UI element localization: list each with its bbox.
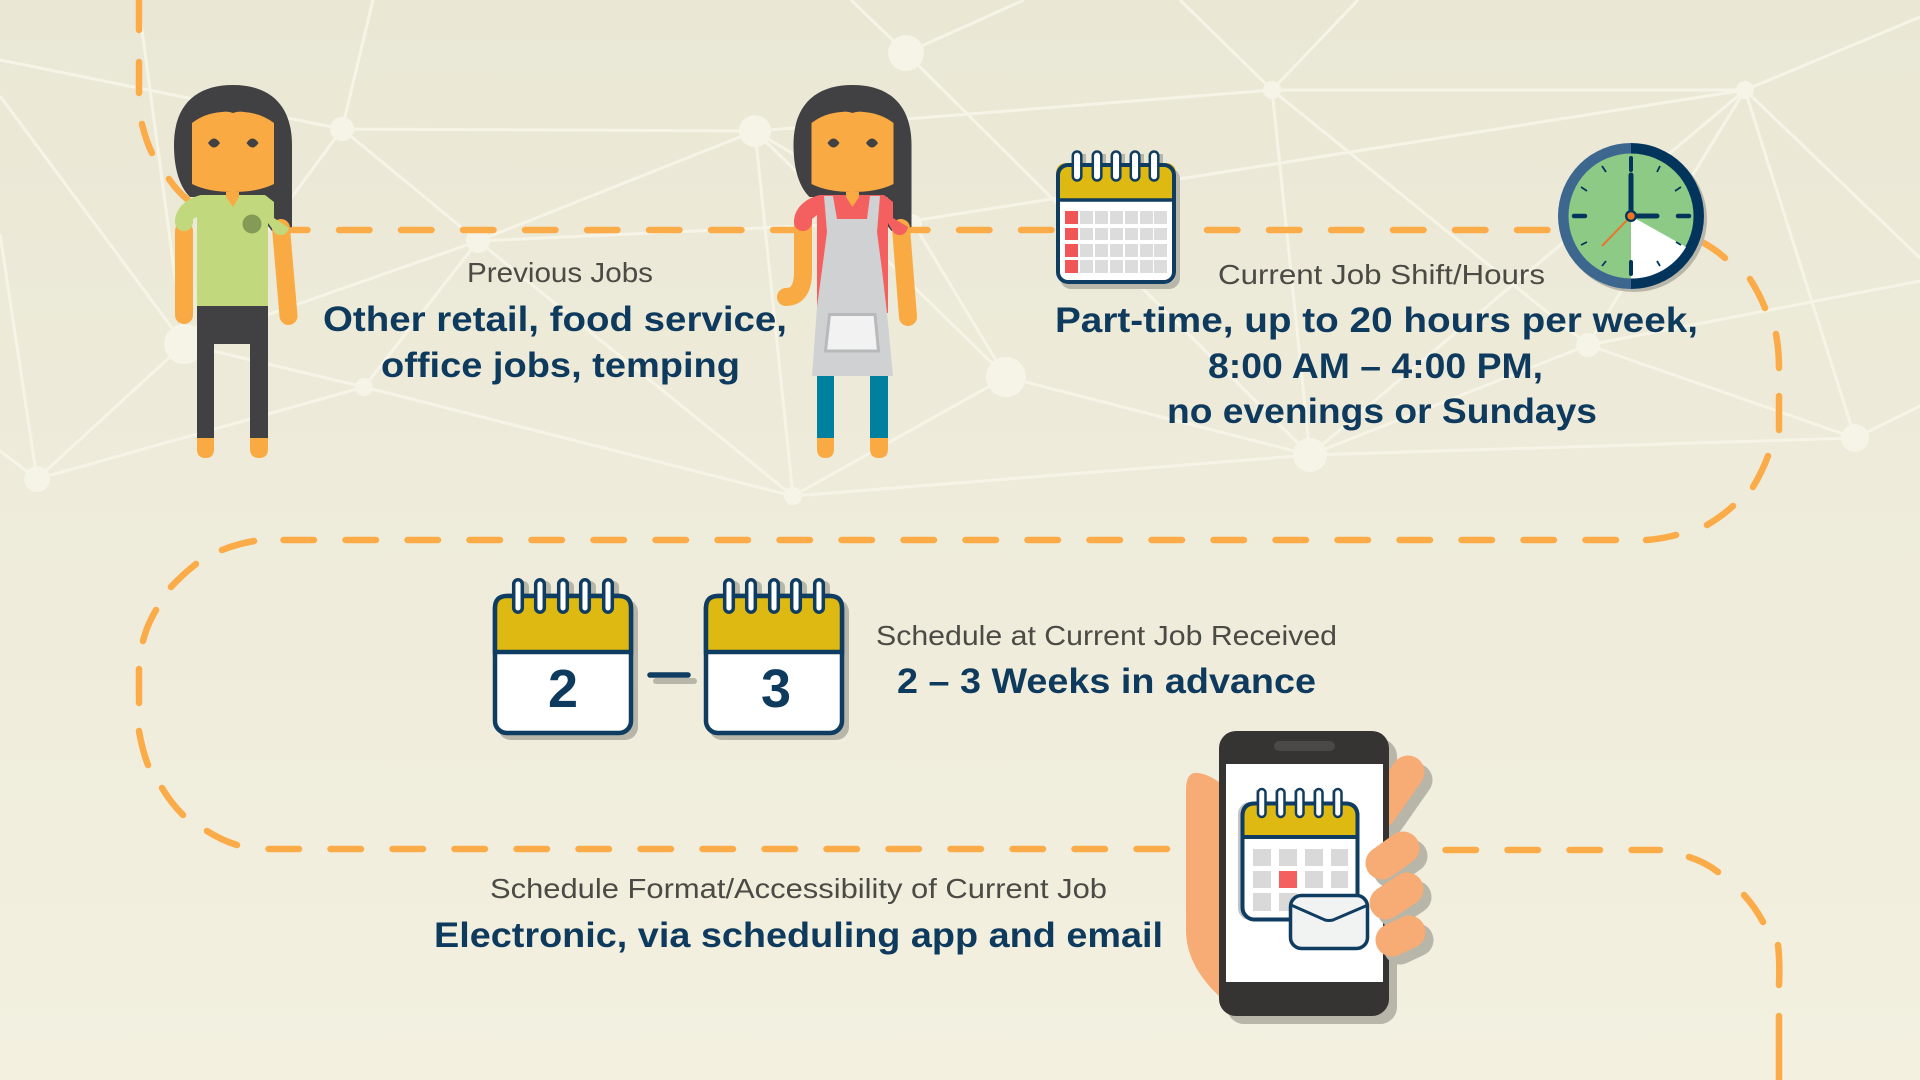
- icon: monthly calendar: [1056, 152, 1180, 289]
- icon: calendar showing 3: 3: [761, 659, 791, 719]
- dash between calendars: [650, 675, 694, 681]
- previous jobs text: Previous Jobs: [467, 257, 653, 288]
- worker in previous job: green shirt: [174, 85, 292, 458]
- schedule received text: [876, 620, 1337, 701]
- icon: hand holding phone with calendar and envelope: [1186, 731, 1417, 1024]
- current job shift and hours text: no evenings or Sundays: [1167, 392, 1597, 431]
- schedule format text: Schedule Format/Accessibility of Current Job: [490, 873, 1107, 904]
- schedule received text: Schedule at Current Job Received: [876, 620, 1337, 651]
- previous jobs text: office jobs, temping: [381, 346, 740, 385]
- current job shift and hours text: [1055, 259, 1698, 431]
- schedule received text: 2 – 3 Weeks in advance: [897, 662, 1316, 701]
- previous jobs text: Other retail, food service,: [323, 300, 787, 339]
- icon: calendar showing 3: [706, 580, 849, 740]
- schedule format text: Electronic, via scheduling app and email: [434, 916, 1163, 955]
- background network pattern: [0, 0, 1920, 505]
- current job shift and hours text: Part-time, up to 20 hours per week,: [1055, 301, 1698, 340]
- worker in current job: apron: [786, 85, 912, 458]
- current job shift and hours text: 8:00 AM – 4:00 PM,: [1208, 347, 1543, 386]
- icon: clock with shift wedge: [1558, 143, 1707, 292]
- icon: calendar showing 2: [495, 580, 638, 740]
- current job shift and hours text: Current Job Shift/Hours: [1218, 259, 1545, 290]
- icon: calendar showing 2: 2: [548, 659, 578, 719]
- previous jobs text: [323, 257, 787, 385]
- schedule format text: [434, 873, 1163, 955]
